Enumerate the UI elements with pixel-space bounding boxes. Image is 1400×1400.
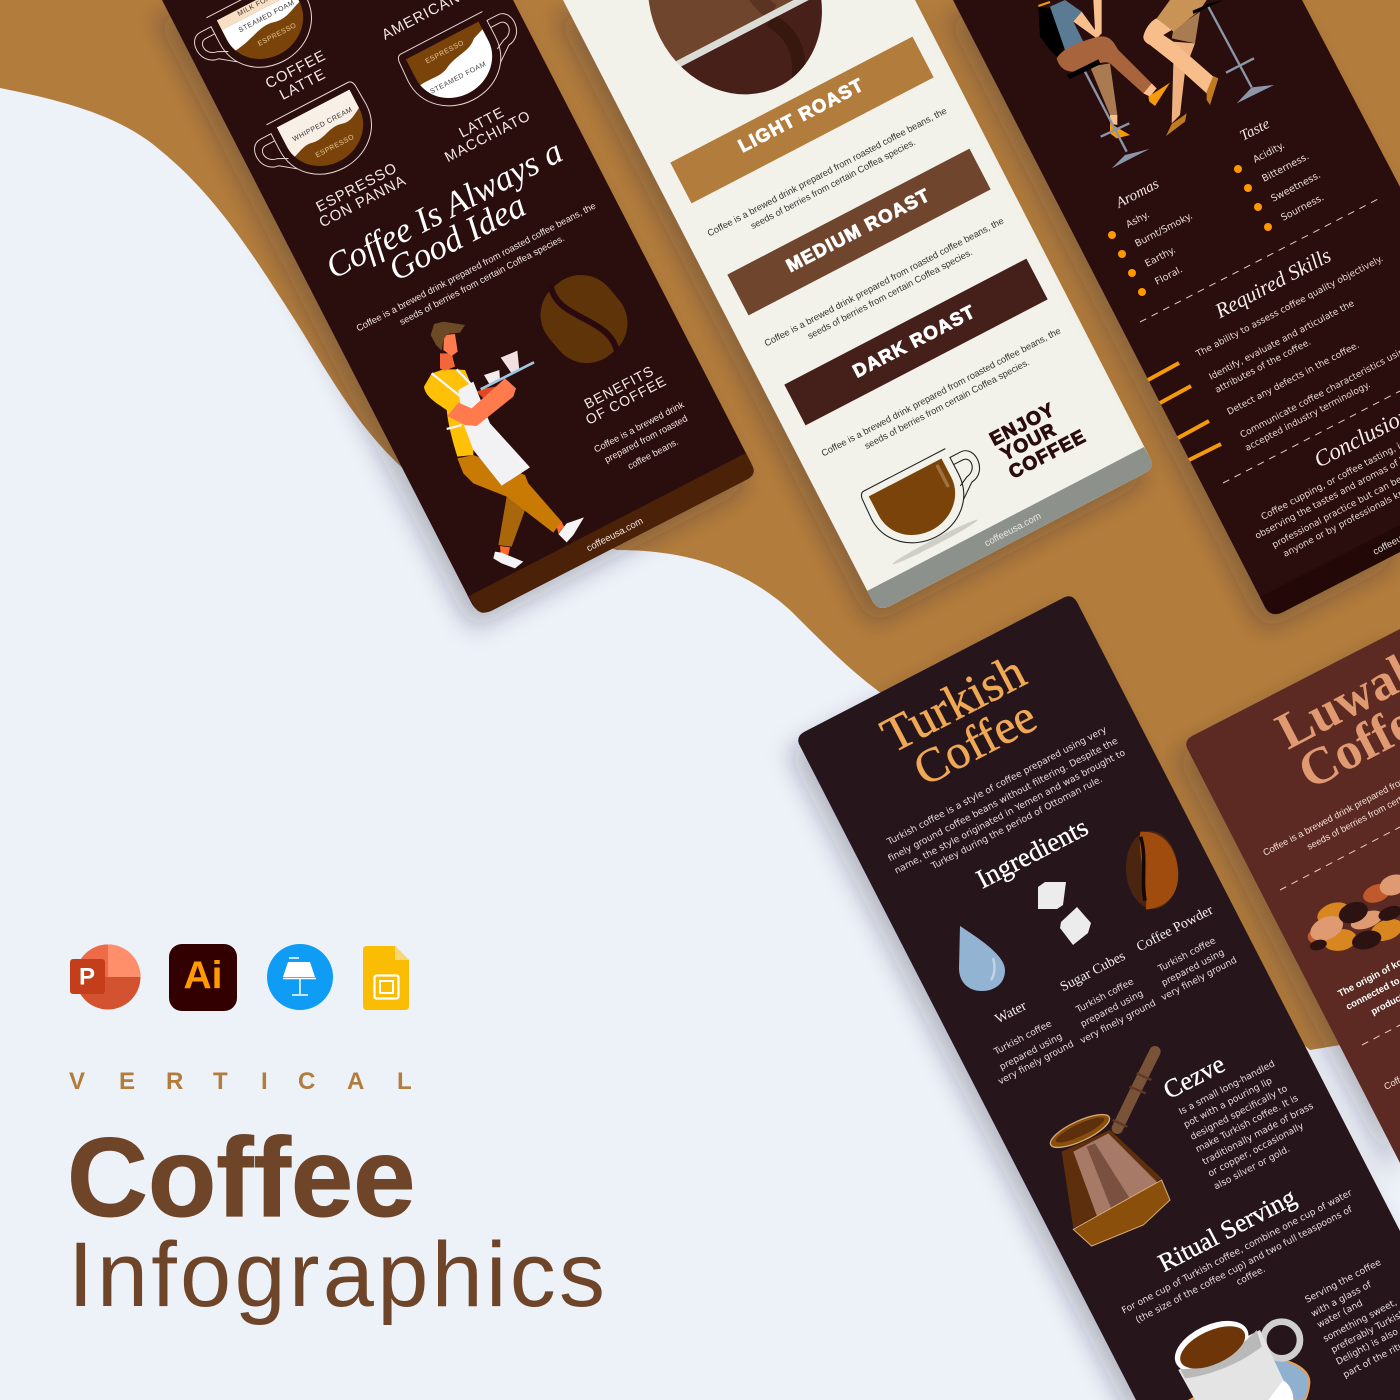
cezve text: pot with a pouring lip — [1182, 1075, 1274, 1131]
footer url: coffeeusa.com — [983, 511, 1043, 549]
label: latte macchiato: MACCHIATO — [442, 108, 534, 166]
heading: ritual serving: Ritual Serving — [1153, 1182, 1301, 1278]
cup: latte macchiato — [398, 11, 518, 106]
aromas list — [1108, 176, 1195, 296]
ingredient labels: Coffee Powder — [1134, 903, 1216, 955]
skills list: Identify, evaluate and articulate the — [1208, 299, 1357, 383]
icon: sugar cubes — [1038, 882, 1091, 945]
label: coffee latte: COFFEE — [263, 48, 329, 92]
heading: ingredients: Ingredients — [971, 812, 1093, 894]
ingredient descriptions: prepared using — [1160, 947, 1226, 989]
serving text: Serving the coffee — [1303, 1257, 1383, 1306]
icon: keynote — [267, 944, 333, 1010]
ingredient descriptions: prepared using — [1079, 988, 1145, 1030]
taste list: Sweetness. — [1269, 170, 1323, 205]
brown wave shape — [0, 0, 1400, 1050]
text: medium roast: seeds of berries from certain Coffea species. — [806, 247, 974, 341]
icon: water drop — [959, 926, 1005, 991]
serving text: water (and — [1315, 1298, 1365, 1331]
ingredient labels: Sugar Cubes — [1058, 949, 1128, 995]
ingredient descriptions: very finely ground — [996, 1039, 1076, 1087]
cezve text: traditionally made of brass — [1201, 1100, 1316, 1167]
icon: illustrator — [169, 944, 237, 1011]
ritual text: coffee. — [1235, 1264, 1267, 1288]
bar: light roast: LIGHT ROAST — [735, 74, 867, 156]
bar: medium roast — [727, 149, 991, 315]
bar: dark roast — [784, 259, 1048, 425]
text: dark roast: Coffee is a brewed drink prepared from roasted coffee beans, the — [820, 326, 1062, 458]
illustration: cezve — [1046, 1052, 1170, 1246]
benefits text: coffee beans. — [626, 437, 680, 471]
ingredient descriptions: Turkish coffee — [1073, 976, 1136, 1016]
skills list — [1194, 254, 1400, 454]
icon: coffee bean — [1123, 829, 1181, 911]
benefits text: prepared from roasted — [603, 413, 689, 465]
aromas list: Floral. — [1153, 264, 1185, 288]
title: turkish coffee: Coffee — [905, 690, 1045, 796]
bar: dark roast: DARK ROAST — [849, 300, 979, 382]
title: turkish coffee: Turkish — [872, 643, 1034, 763]
text: light roast: seeds of berries from certain Coffea species. — [749, 137, 917, 231]
ingredient descriptions: very finely ground — [1078, 998, 1158, 1046]
aromas list: Earthy. — [1143, 245, 1178, 270]
script heading: Coffee Is Always a — [319, 131, 569, 287]
cezve text: or copper, occasionally — [1206, 1120, 1306, 1179]
skills list: attributes of the coffee. — [1214, 338, 1313, 396]
cezve text: Is a small long-handled — [1177, 1058, 1277, 1118]
cezve text: also silver or gold. — [1212, 1144, 1292, 1192]
illustration: turkish cup and saucer — [1167, 1310, 1309, 1400]
waiter illustration — [424, 322, 584, 568]
icon: powerpoint — [70, 944, 140, 1010]
label: latte macchiato: LATTE — [457, 105, 507, 141]
panel: coffee cupping card — [953, 0, 1400, 614]
illustration: women on bar stools — [1038, 0, 1274, 168]
ingredient descriptions: Turkish coffee — [1155, 935, 1218, 975]
cup: latte macchiato: STEAMED FOAM — [429, 61, 488, 96]
intro text: name, the style originated in Yemen and was brought to — [893, 747, 1128, 877]
enjoy your coffee: YOUR — [998, 419, 1060, 465]
ingredient descriptions — [991, 935, 1239, 1087]
serving text: with a glass of — [1309, 1279, 1374, 1320]
cup: espresso con panna: WHIPPED CREAM — [292, 106, 354, 143]
skills list: accepted industry terminology. — [1244, 380, 1372, 454]
icon: google slides — [363, 946, 409, 1010]
aromas list: Ashy. — [1124, 209, 1152, 231]
cup: coffee latte — [194, 0, 312, 68]
cezve text: make Turkish coffee. It is — [1194, 1093, 1300, 1155]
aromas list: Burnt/Smoky. — [1133, 211, 1195, 250]
title: infographics: Infographics — [68, 1224, 605, 1326]
footer url: coffeeusa.com — [585, 516, 645, 554]
cup: coffee latte: ESPRESSO — [257, 22, 298, 48]
intro text: Turkish coffee is a style of coffee prepared using very — [885, 724, 1109, 848]
panel: luwak coffee card — [1186, 629, 1400, 1163]
cup: espresso con panna — [254, 81, 372, 175]
cup: espresso con panna: ESPRESSO — [315, 134, 356, 159]
taste list: Bitterness. — [1260, 151, 1311, 185]
skills list: The ability to assess coffee quality objectively. — [1194, 254, 1385, 360]
label: espresso con panna: ESPRESSO — [314, 160, 400, 216]
enjoy your coffee: COFFEE — [1006, 426, 1090, 483]
heading: benefits of coffee: OF COFFEE — [583, 372, 669, 428]
title: coffee: Coffee — [67, 1115, 415, 1240]
script heading: Good Idea — [382, 185, 532, 289]
label: coffee latte: LATTE — [277, 66, 329, 104]
benefits text: Coffee is a brewed drink — [592, 399, 686, 455]
icon: illustrator: Ai — [184, 954, 222, 998]
ingredient labels: Water — [993, 999, 1029, 1027]
icon: powerpoint: P — [79, 964, 95, 990]
body text: Coffee is a brewed drink prepared from roasted coffee beans, the — [355, 201, 597, 333]
cezve text: designed specifically to — [1189, 1083, 1290, 1143]
taste list: Taste — [1237, 116, 1273, 145]
serving text: something sweet, — [1321, 1297, 1399, 1345]
coffee bean pile — [1306, 871, 1400, 953]
intro text: finely ground coffee beans without filtering. Despite the — [886, 736, 1120, 864]
cup: coffee latte: STEAMED FOAM — [238, 0, 296, 34]
heading: required skills: Required Skills — [1210, 243, 1335, 323]
ritual text: (the size of the coffee cup) and two full teaspoons of — [1134, 1204, 1355, 1326]
enjoy your coffee: ENJOY — [987, 399, 1059, 450]
heading: benefits of coffee: BENEFITS — [581, 362, 657, 412]
ingredient descriptions: Turkish coffee — [991, 1018, 1054, 1058]
label: vertical: VERTICAL — [69, 1068, 412, 1095]
serving text — [1303, 1257, 1400, 1381]
panel: roast levels card — [563, 0, 1152, 608]
orange skill markers — [1148, 363, 1221, 460]
enjoy your coffee — [987, 399, 1090, 483]
software icons — [70, 944, 409, 1011]
text: medium roast: Coffee is a brewed drink prepared from roasted coffee beans, the — [763, 216, 1005, 348]
taste list — [1234, 116, 1326, 231]
text: light roast: Coffee is a brewed drink prepared from roasted coffee beans, the — [706, 106, 948, 238]
illustration: coffee cup — [858, 438, 1000, 567]
taste list: Sourness. — [1279, 192, 1326, 224]
panel: coffee drinks card — [162, 0, 754, 613]
label: espresso con panna: CON PANNA — [317, 173, 409, 231]
ingredient descriptions: very finely ground — [1159, 955, 1239, 1003]
skills list: Detect any defects in the coffee. — [1226, 341, 1361, 418]
large coffee bean — [648, 0, 822, 94]
heading: cezve: Cezve — [1158, 1049, 1230, 1105]
bar: light roast — [670, 37, 934, 203]
ingredient descriptions: prepared using — [998, 1031, 1064, 1073]
body text: seeds of berries from certain Coffea species. — [398, 233, 566, 327]
aromas list: Aromas — [1113, 176, 1162, 212]
bar: medium roast: MEDIUM ROAST — [782, 184, 934, 276]
icon: coffee bean — [524, 258, 644, 380]
cup: latte macchiato: ESPRESSO — [425, 40, 466, 65]
ingredient labels — [993, 903, 1216, 1027]
ritual text: For one cup of Turkish coffee, combine one cup of water — [1120, 1187, 1354, 1316]
taste list: Acidity. — [1251, 140, 1287, 166]
panel: turkish coffee card — [798, 596, 1400, 1400]
intro text: Turkey during the period of Ottoman rule. — [929, 774, 1104, 873]
cezve text — [1177, 1058, 1316, 1192]
text: dark roast: seeds of berries from certain Coffea species. — [863, 357, 1031, 451]
